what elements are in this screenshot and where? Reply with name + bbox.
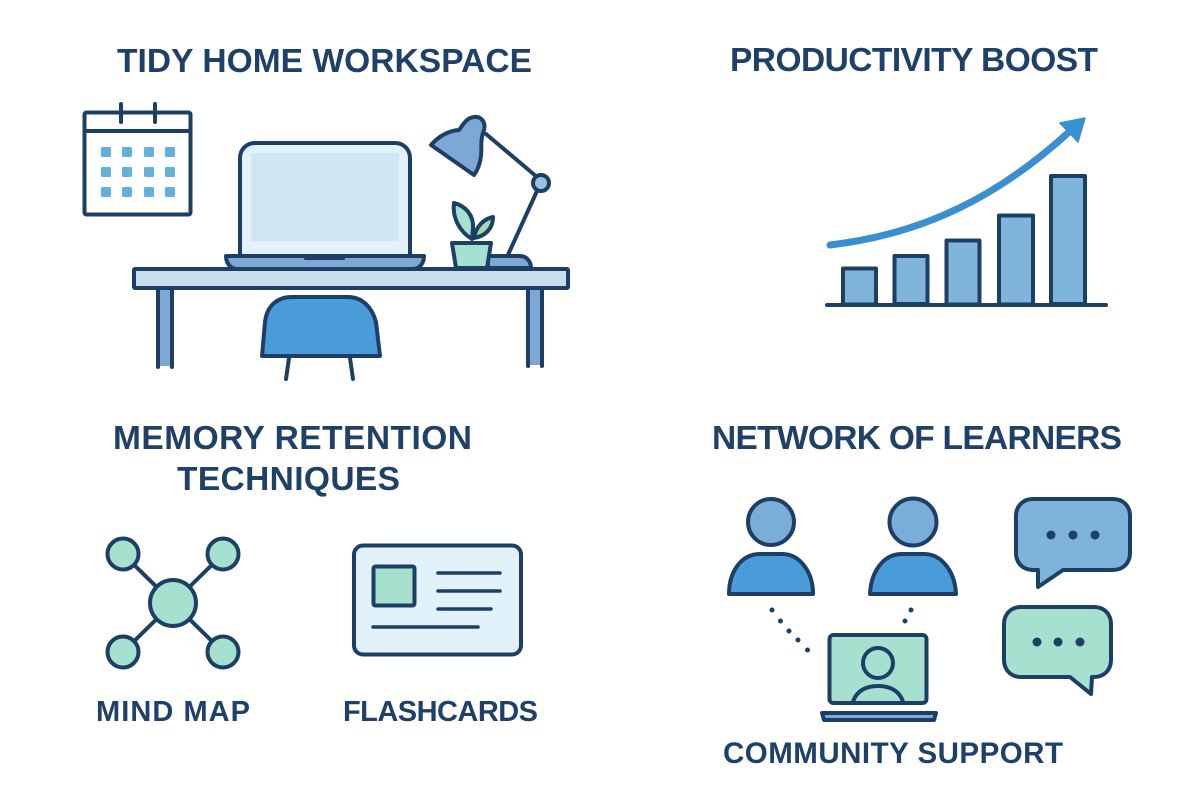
panel: productivity boost bbox=[730, 42, 1106, 305]
heading: memory retention techniques: MEMORY RETENTION bbox=[113, 420, 472, 457]
icon: potted plant bbox=[452, 203, 493, 268]
icon: mind map bbox=[108, 538, 238, 668]
icon: video call laptop bbox=[822, 635, 936, 720]
icon: learner two bbox=[870, 498, 956, 594]
panel: network of learners bbox=[712, 420, 1130, 770]
icon: laptop bbox=[226, 143, 424, 269]
label: community support: COMMUNITY SUPPORT bbox=[723, 737, 1063, 770]
panel: tidy home workspace bbox=[84, 43, 568, 379]
bar chart bbox=[827, 176, 1106, 305]
icon: calendar bbox=[84, 104, 190, 214]
icon: desk bbox=[134, 269, 568, 367]
label: flashcards: FLASHCARDS bbox=[343, 696, 538, 728]
heading: productivity boost: PRODUCTIVITY BOOST bbox=[730, 42, 1099, 79]
heading: tidy home workspace: TIDY HOME WORKSPACE bbox=[117, 43, 532, 80]
icon: chair bbox=[262, 297, 380, 379]
icon: learner one bbox=[729, 499, 813, 594]
heading line two: TECHNIQUES bbox=[177, 461, 400, 498]
heading: network of learners: NETWORK OF LEARNERS bbox=[712, 420, 1122, 457]
icon: desk lamp bbox=[431, 117, 549, 268]
icon: chat bubble green bbox=[1004, 607, 1111, 694]
icon: chat bubble blue bbox=[1016, 499, 1130, 587]
arrow: growth trend bbox=[830, 118, 1085, 245]
icon: flashcard bbox=[354, 546, 521, 654]
label: mind map: MIND MAP bbox=[96, 696, 250, 728]
connector: dotted lines bbox=[770, 608, 914, 652]
panel: memory retention techniques bbox=[96, 420, 538, 728]
